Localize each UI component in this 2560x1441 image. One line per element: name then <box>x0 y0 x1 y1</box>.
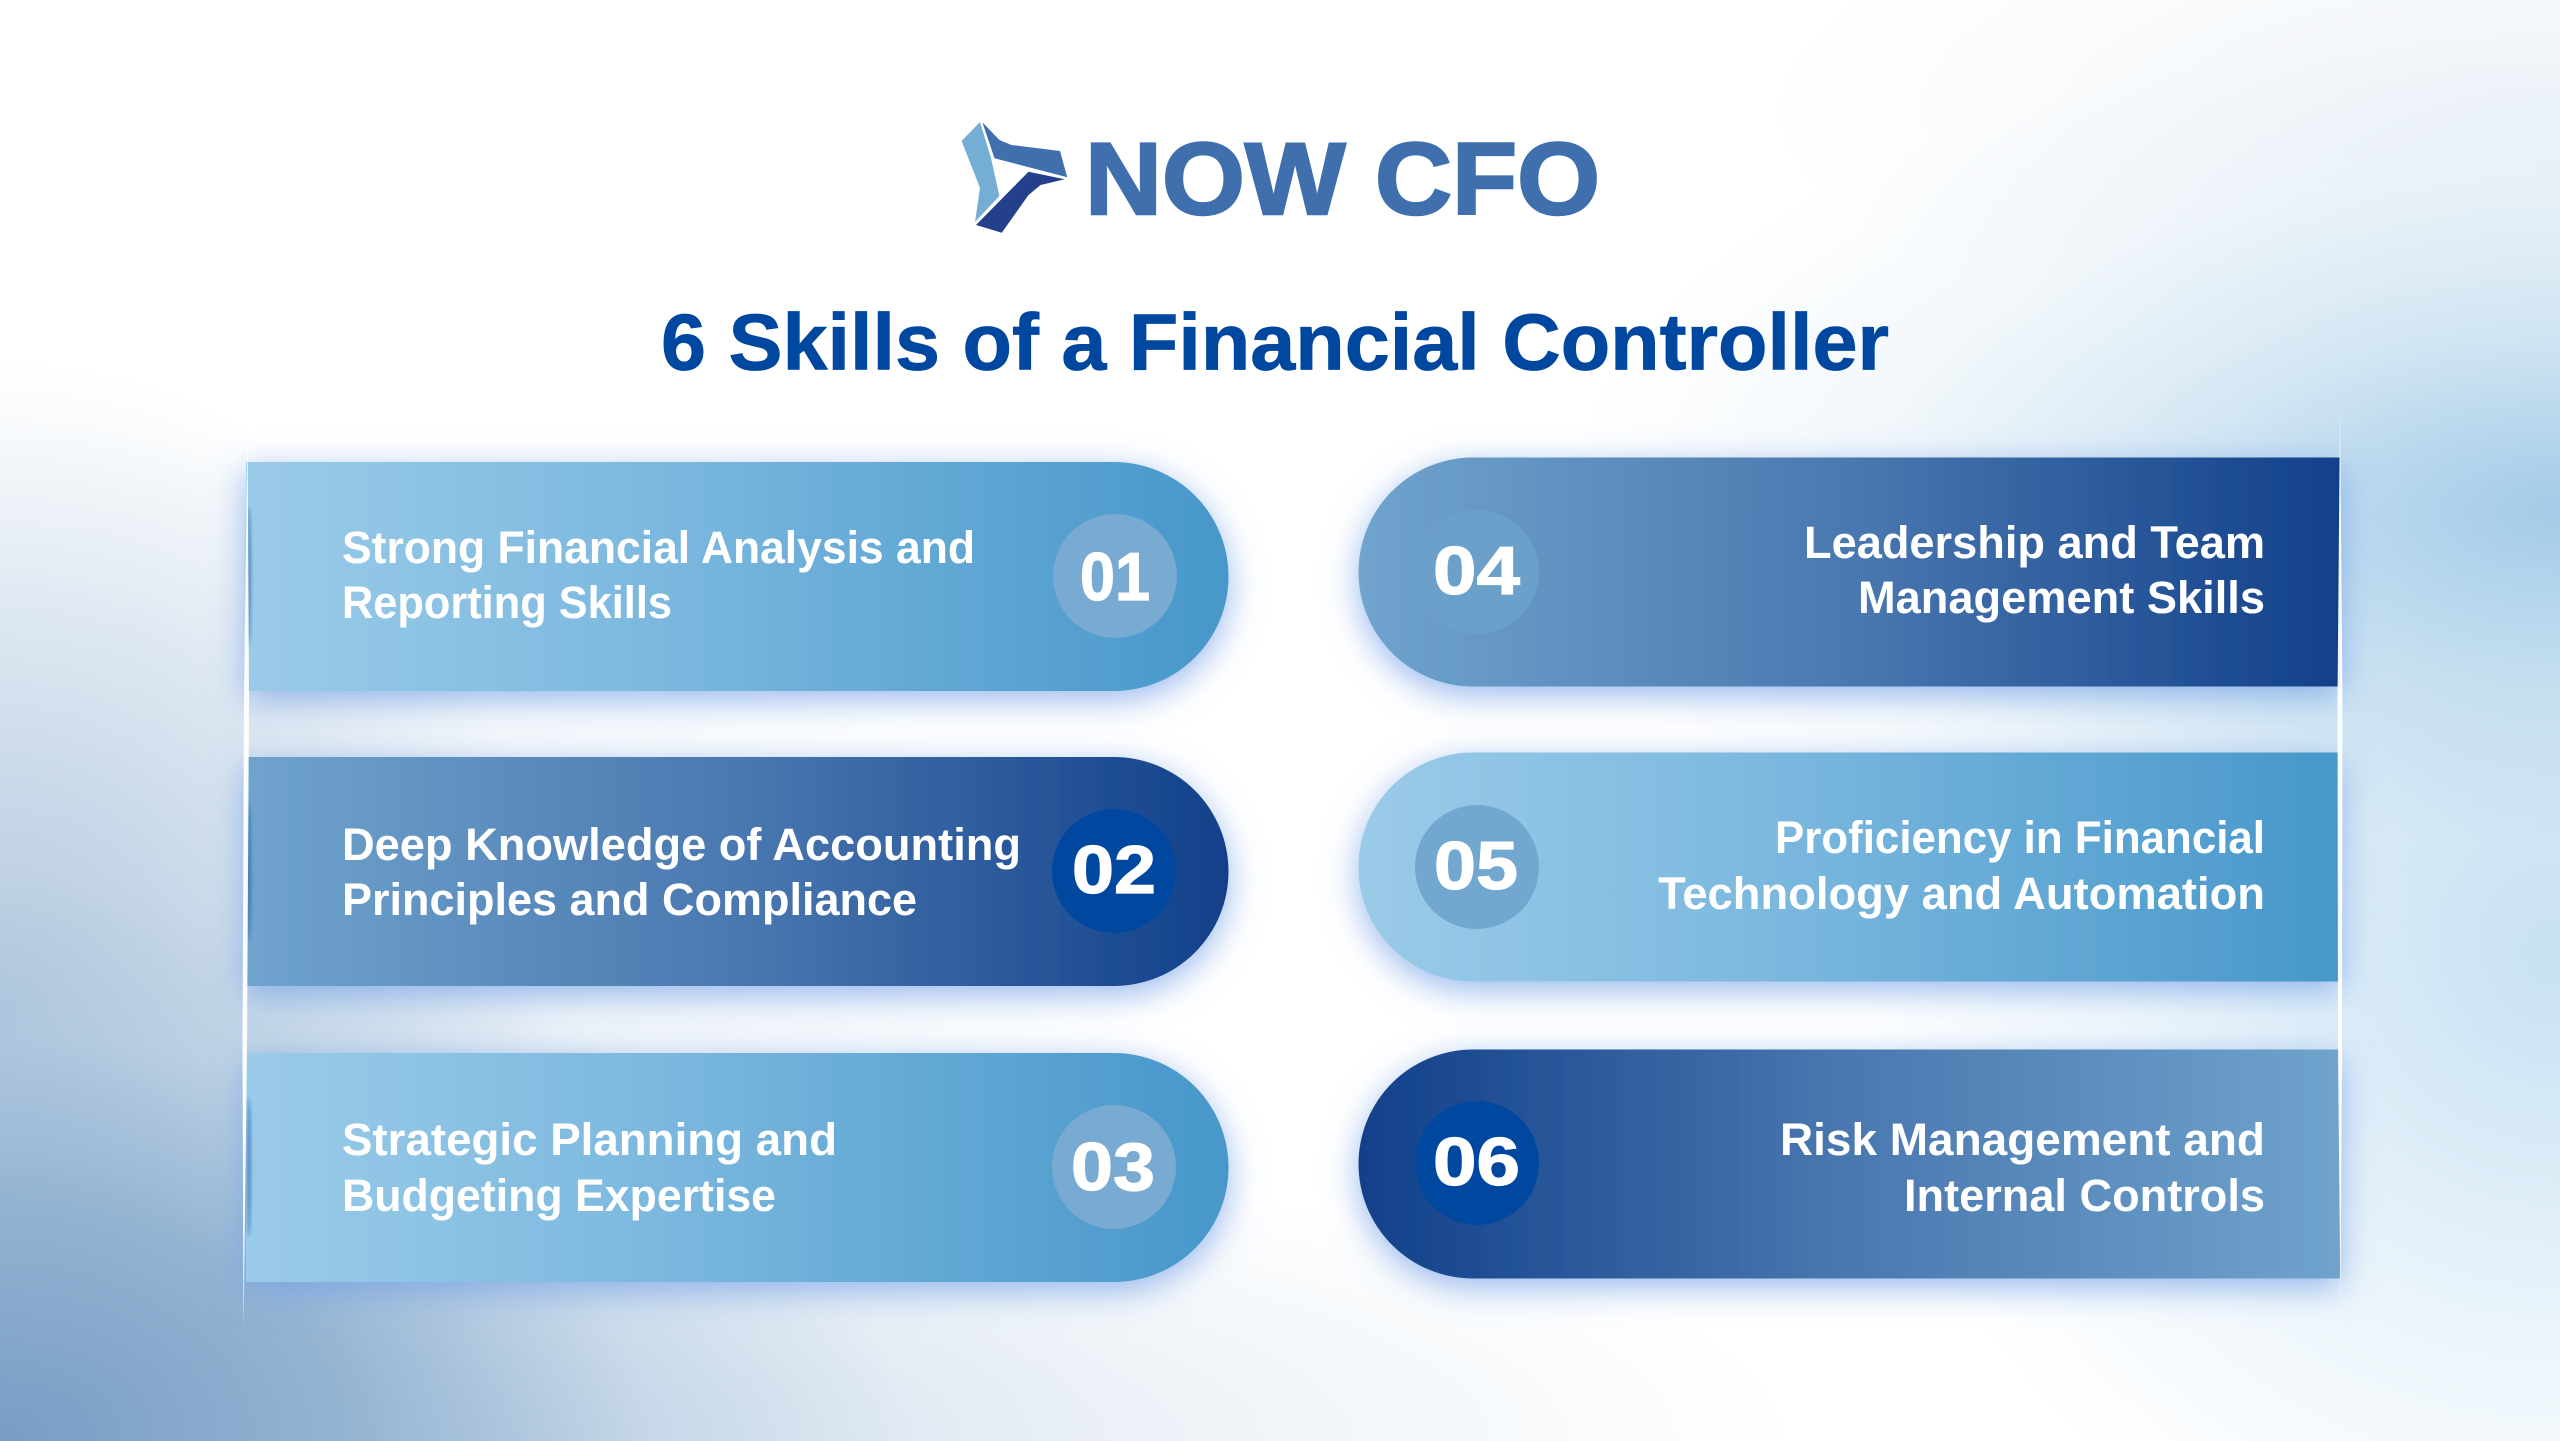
skill 03 label: Budgeting Expertise <box>342 1170 776 1221</box>
skill 06 label: Risk Management and <box>1780 1114 2265 1165</box>
skill 02 label: Principles and Compliance <box>342 874 917 925</box>
skill 04 label <box>1804 517 2265 623</box>
skill 04 badge: 04 <box>1433 533 1520 609</box>
skill 06 badge <box>1415 1101 1539 1225</box>
logo icon <box>962 122 1067 233</box>
skill 03 label: Strategic Planning and <box>342 1114 837 1165</box>
skill 05 label <box>1658 812 2265 919</box>
panel: skill 02 <box>246 757 1228 986</box>
title: 6 Skills of a Financial Controller <box>661 298 1889 386</box>
skill 03 label <box>342 1114 837 1221</box>
panel: skill 06 <box>1358 1050 2340 1278</box>
logo wordmark: NOW CFO <box>1085 122 1600 236</box>
skill 06 label: Internal Controls <box>1904 1170 2265 1221</box>
right vertical line <box>2338 405 2342 1305</box>
skill 01 badge: 01 <box>1080 539 1150 615</box>
skill 05 badge <box>1415 805 1539 929</box>
left line shading <box>247 506 251 1237</box>
logo <box>962 122 1600 236</box>
panel: skill 04 <box>1359 458 2340 686</box>
panel: skill 05 <box>1358 752 2340 982</box>
panel: skill 03 <box>246 1053 1228 1282</box>
skill 01 label <box>342 522 975 628</box>
skill 02 badge: 02 <box>1072 832 1156 908</box>
skill 06 badge: 06 <box>1433 1124 1520 1200</box>
skill 02 badge <box>1052 809 1176 933</box>
skill 05 badge: 05 <box>1434 828 1518 904</box>
skill 06 label <box>1780 1114 2265 1221</box>
skill 02 label <box>342 819 1021 925</box>
skill 05 label: Proficiency in Financial <box>1775 812 2265 863</box>
left vertical line <box>242 420 249 1330</box>
skill 04 label: Management Skills <box>1858 572 2265 623</box>
skill 04 badge <box>1415 510 1539 634</box>
skill 01 label: Reporting Skills <box>342 577 672 628</box>
skill 03 badge: 03 <box>1071 1129 1155 1205</box>
skill 01 badge <box>1053 514 1177 638</box>
skill 01 label: Strong Financial Analysis and <box>342 522 975 573</box>
skill 05 label: Technology and Automation <box>1658 868 2265 919</box>
skill 03 badge <box>1052 1105 1176 1229</box>
skill 04 label: Leadership and Team <box>1804 517 2265 568</box>
panel: skill 01 <box>246 462 1228 691</box>
skill 02 label: Deep Knowledge of Accounting <box>342 819 1021 870</box>
